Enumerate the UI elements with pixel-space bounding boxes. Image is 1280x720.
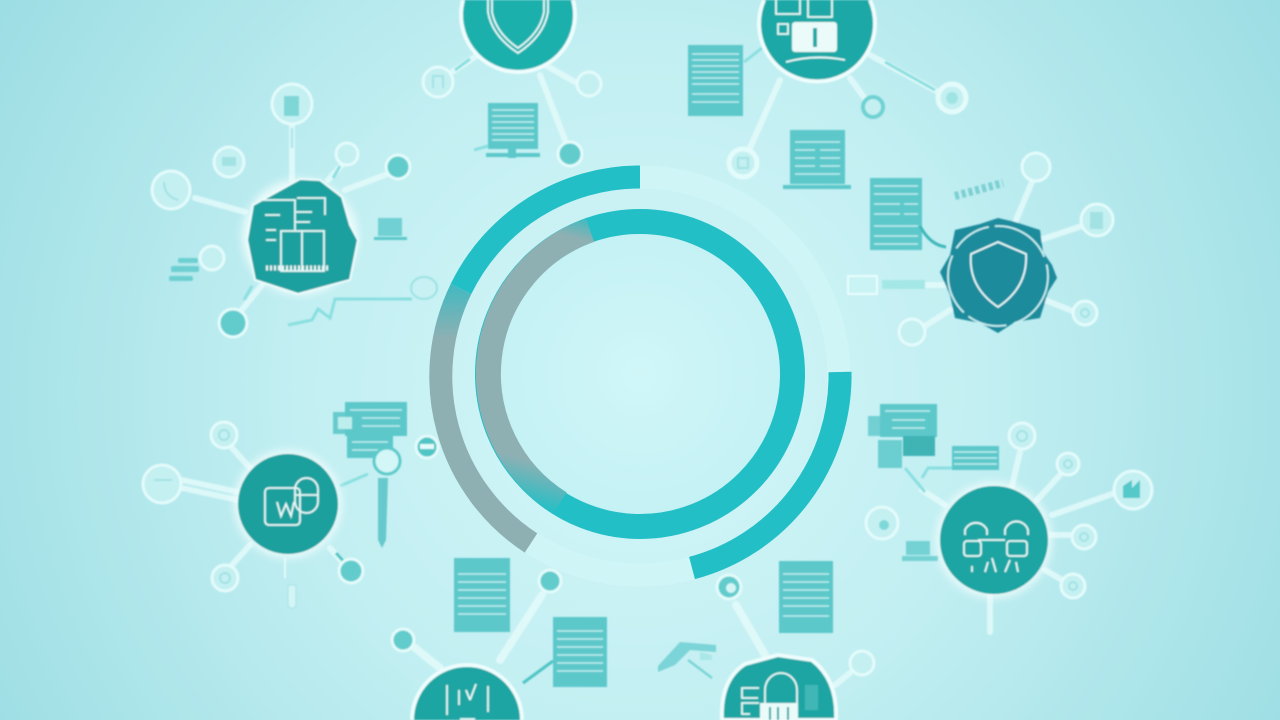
outer ring teal arc right (692, 372, 840, 568)
bars icon (447, 684, 488, 719)
links (922, 452, 1115, 632)
links (452, 55, 575, 140)
links (182, 448, 345, 565)
links (415, 595, 542, 668)
bar link (848, 276, 925, 294)
node: bottom-right lock (658, 561, 874, 720)
document (688, 45, 743, 116)
links (750, 55, 940, 148)
node: lower-right circle (866, 404, 1152, 632)
laptop (902, 541, 938, 561)
outer ring grey arc (441, 289, 531, 543)
core blob (722, 655, 836, 720)
shield icon (971, 242, 1026, 307)
core circle (461, 0, 575, 72)
core circle (940, 486, 1048, 594)
lined bar block (952, 446, 999, 470)
document cluster (333, 402, 407, 458)
laptop icon (374, 218, 407, 240)
core octagon (247, 179, 358, 294)
pale ring track (441, 177, 839, 575)
satellite circles (729, 84, 966, 177)
satellite circles (866, 423, 1152, 598)
document (779, 561, 833, 633)
satellite circles (152, 84, 410, 337)
document cluster (868, 404, 937, 468)
node: top-right lock (688, 0, 966, 189)
lock icon (742, 673, 818, 720)
satellite circles (423, 67, 601, 166)
people icon (964, 521, 1028, 572)
core circle (238, 454, 338, 554)
line chart with circle (288, 277, 437, 325)
laptop document (783, 130, 851, 189)
node: left chip (152, 84, 437, 337)
node: bottom-left circle (392, 558, 607, 720)
ring clip (374, 448, 400, 474)
chip icon (258, 198, 330, 271)
satellite circles (899, 153, 1113, 345)
shield icon (488, 0, 548, 53)
links (736, 605, 765, 655)
document (553, 617, 607, 687)
inner ring grey arc (488, 230, 590, 503)
inner disc (500, 234, 780, 514)
pen (378, 478, 388, 548)
funnel icon (658, 642, 716, 678)
core octagon glow (242, 179, 358, 295)
small stripes (955, 183, 1003, 196)
node: right shield (848, 153, 1113, 345)
inner ring teal (488, 222, 792, 526)
bottom pill (288, 585, 296, 608)
links (925, 182, 1085, 326)
core gear (940, 218, 1057, 333)
document (454, 558, 510, 632)
satellite circles (717, 575, 874, 675)
stack icon (169, 258, 199, 281)
core circle (759, 0, 875, 82)
monitor document (474, 103, 540, 158)
core glow (234, 450, 342, 558)
outer ring teal arc top (461, 177, 640, 289)
lock icon (776, 0, 845, 62)
satellite circles (143, 422, 438, 591)
node: top-left shield (423, 0, 601, 166)
links (195, 124, 385, 312)
folder and lock icon (265, 478, 318, 525)
node: lower-left circle (143, 402, 438, 608)
core glow (936, 482, 1052, 598)
inner ring (948, 226, 1048, 326)
document (870, 178, 922, 250)
satellite circles (392, 570, 561, 651)
central ring chart (441, 177, 840, 575)
core circle (412, 665, 522, 720)
